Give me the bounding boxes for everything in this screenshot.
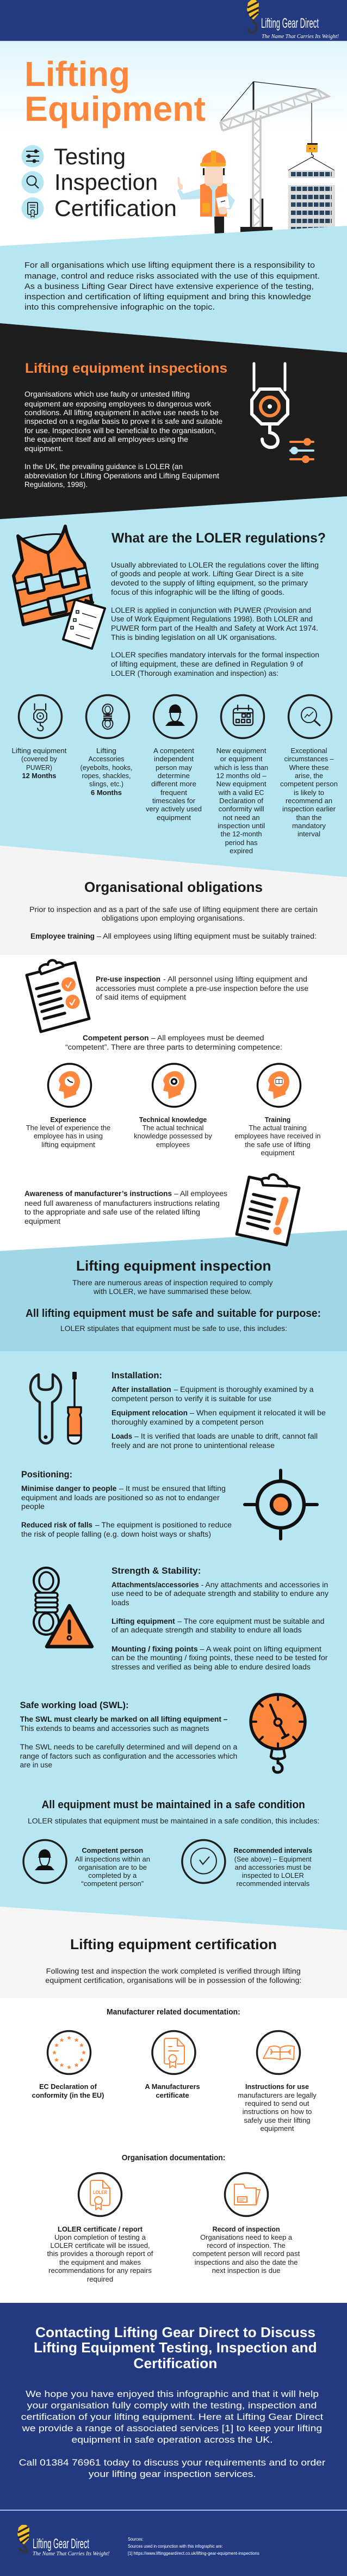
section: strength and stability — [111, 1566, 329, 1671]
footer logo: The Name That Carries Its Weight! — [33, 2551, 110, 2557]
body text: focus of this infographic will be the lifting of goods. — [111, 588, 284, 596]
section: installation: – Equipment is thoroughly examined by a — [174, 1385, 314, 1394]
header bar with logo — [0, 0, 347, 41]
caption: competent person: “competent person” — [81, 1879, 144, 1888]
caption: manufacturers certificate — [145, 2082, 200, 2099]
section: positioning: – It must be ensured that lifting — [119, 1484, 226, 1493]
caption: exceptional circumstances: competent person — [280, 780, 338, 788]
section: safe working load: Safe working load (SWL): — [20, 1700, 129, 1710]
caption: LOLER certificate: LOLER certificate / report — [58, 2225, 143, 2233]
caption: competent independent person: different more — [151, 780, 196, 788]
caption: LOLER certificate: this provides a thorough report of — [47, 2250, 153, 2258]
icon: experience head with clock — [48, 1064, 91, 1107]
panel: introduction — [0, 226, 347, 359]
text: awareness of manufacturer's instructions: equipment — [24, 1217, 60, 1225]
body text: This is binding legislation on all UK organisations. — [111, 633, 277, 642]
caption: competent person: Competent person — [82, 1846, 143, 1854]
body text: devoted to the supply of lifting equipment, so the primary — [111, 579, 308, 587]
section: strength and stability: use need to be of adequate strength and stability to endure any — [111, 1589, 329, 1598]
section: strength and stability: Mounting / fixing points — [111, 1645, 198, 1653]
caption: competent person — [75, 1846, 150, 1888]
caption: new equipment: New equipment — [216, 747, 267, 755]
sources: Sources: — [128, 2536, 144, 2542]
caption: technical knowledge — [134, 1116, 212, 1149]
caption: lifting accessories 6 months: ropes, shackles, — [82, 772, 131, 780]
caption: EC declaration: conformity (in the EU) — [32, 2091, 104, 2099]
caption: record of inspection: competent person will record past — [193, 2250, 300, 2258]
caption: LOLER certificate: the equipment and makes — [59, 2258, 141, 2266]
caption: instructions for use: safely use their lifting — [244, 2116, 310, 2124]
text: pre-use inspection — [96, 975, 308, 1001]
caption: training: employees have received in — [235, 1132, 321, 1140]
caption: competent independent person: A competent — [153, 747, 194, 755]
caption: exceptional circumstances: arise, the — [295, 772, 323, 780]
caption: LOLER certificate: required — [87, 2275, 113, 2283]
caption: technical knowledge: employees — [156, 1141, 190, 1149]
body text: of goods and people at work. Lifting Gear Direct is a site — [111, 570, 303, 578]
icon: magnifier trend in circle — [288, 695, 332, 738]
icon: calendar in circle — [221, 695, 264, 738]
icon: target — [245, 1470, 317, 1539]
text: awareness of manufacturer's instructions: – All employees — [174, 1190, 227, 1198]
caption: technical knowledge: knowledge possessed by — [134, 1132, 212, 1140]
caption: lifting equipment 12 months: 12 Months — [22, 772, 57, 780]
section: installation: competent person to verify it is suitable for use — [111, 1395, 271, 1403]
caption: lifting equipment 12 months: PUWER) — [26, 763, 52, 772]
section: safe working load: range of factors such as configuration and the accessories which — [20, 1752, 237, 1760]
subheading note: LOLER stipulates that equipment must be maintained in a safe condition, this includes: — [28, 1817, 319, 1825]
section: strength and stability: loads — [111, 1599, 129, 1607]
body text: Regulations, 1998). — [24, 480, 88, 489]
caption: experience — [26, 1116, 110, 1149]
caption: record of inspection: next inspection is due — [212, 2266, 281, 2275]
body text: equipment are exposing employees to dangerous work — [24, 400, 211, 408]
caption: new equipment: 12 months old – — [216, 772, 267, 780]
caption: recommended intervals: recommended intervals — [236, 1879, 310, 1888]
icon: hook block in circle — [18, 695, 62, 738]
icon: records folder in circle — [225, 2173, 268, 2216]
caption: new equipment: Declaration of — [219, 797, 263, 805]
caption: competent person: organisation are to be — [78, 1863, 147, 1871]
section: strength and stability: can be the mounting / fixing points, these need to be tested for — [111, 1654, 328, 1662]
text: awareness of manufacturer's instructions: need full awareness of manufacturers instructions relating — [24, 1199, 220, 1207]
caption: experience: The level of experience the — [26, 1124, 110, 1132]
section: strength and stability: - Any attachments and accessories in — [201, 1581, 328, 1589]
heading: Lifting equipment inspections — [25, 361, 227, 376]
panel: contact footer — [0, 2303, 347, 2576]
caption: exceptional circumstances: Exceptional — [290, 747, 327, 755]
section: safe working load — [20, 1700, 238, 1769]
caption: LOLER certificate: Upon completion of testing a — [54, 2233, 146, 2241]
icon: training head with book — [258, 1064, 300, 1107]
employee training line: – All employees using lifting equipment must be suitably trained: — [97, 932, 317, 940]
caption: training: The actual training — [249, 1124, 307, 1132]
caption: record of inspection: inspections and also the date the — [195, 2258, 298, 2266]
panel: what are the LOLER regulations — [12, 526, 338, 855]
section: positioning: Minimise danger to people — [21, 1484, 117, 1493]
caption: exceptional circumstances: recommend an — [286, 797, 332, 805]
intro text — [45, 1967, 301, 1985]
closing text: certification of your lifting equipment. Here at Lifting Gear Direct — [21, 2412, 324, 2422]
heading: Lifting equipment inspection — [76, 1258, 271, 1274]
intro text: Prior to inspection and as a part of the safe use of lifting equipment there are certain — [29, 905, 318, 914]
caption: lifting accessories 6 months: Lifting — [96, 747, 116, 755]
heading: Lifting equipment certification — [70, 1936, 277, 1952]
caption: competent person: All inspections within an — [75, 1855, 150, 1863]
section: positioning: Reduced risk of falls — [21, 1521, 92, 1529]
icon: worker in circle — [23, 1840, 66, 1883]
heading: maintained in safe condition: All equipment must be maintained in a safe condition — [41, 1799, 305, 1811]
caption: lifting equipment 12 months: (covered by — [21, 755, 57, 763]
text: competent person: Competent person — [83, 1034, 149, 1042]
caption: competent independent person: independent — [154, 755, 194, 763]
caption: training: equipment — [261, 1149, 295, 1157]
body text: of lifting equipment, these are defined in Regulation 9 of — [111, 660, 303, 668]
caption: exceptional circumstances: interval — [298, 830, 320, 838]
text: awareness of manufacturer's instructions — [24, 1190, 227, 1225]
caption: new equipment: expired — [230, 847, 253, 855]
subheading: organisation documentation: Organisation documentation: — [122, 2154, 225, 2162]
caption: competent independent person — [146, 747, 202, 822]
illustration: load of building floors — [288, 170, 335, 233]
caption: EC declaration: EC Declaration of — [39, 2082, 97, 2091]
sources — [128, 2536, 259, 2556]
caption: exceptional circumstances: Where these — [289, 763, 329, 772]
caption: instructions for use: instructions on how to — [243, 2107, 312, 2116]
section: installation: freely and are not prone to unintentional release — [111, 1441, 275, 1450]
illustration: tower crane — [220, 82, 334, 232]
heading: Contacting Lifting Gear Direct to Discuss — [35, 2324, 315, 2340]
caption: exceptional circumstances: inspection earlier — [282, 805, 336, 813]
intro text: with LOLER, we have summarised these below. — [93, 1287, 252, 1296]
section: positioning: – The equipment is positioned to reduce — [95, 1521, 232, 1529]
caption: new equipment: New equipment — [216, 780, 267, 788]
caption: technical knowledge: Technical knowledge — [139, 1116, 207, 1124]
caption: competent independent person: determine — [158, 772, 190, 780]
caption: lifting accessories 6 months: (eyebolts, hooks, — [80, 763, 133, 772]
section: strength and stability: stresses and verified as being able to endure desired loads — [111, 1663, 311, 1671]
caption: lifting accessories 6 months — [80, 747, 133, 797]
section: positioning: equipment and loads are positioned so as not to endanger — [21, 1494, 220, 1502]
caption: experience: lifting equipment — [41, 1141, 95, 1149]
body text: Use of Work Equipment Regulations 1998). Both LOLER and — [111, 615, 313, 623]
icon: certification document — [22, 197, 44, 220]
section: strength and stability: – The core equipment must be suitable and — [177, 1617, 324, 1625]
icon: clipboard with exclamation mark — [237, 1174, 299, 1245]
caption: recommended intervals: inspected to LOLER — [242, 1871, 304, 1879]
intro text: There are numerous areas of inspection required to comply — [72, 1279, 273, 1287]
caption: recommended intervals: Recommended intervals — [234, 1846, 312, 1854]
caption: experience: Experience — [50, 1116, 86, 1124]
text: competent person: – All employees must be deemed — [151, 1034, 264, 1042]
caption: training — [235, 1116, 321, 1157]
closing text: We hope you have enjoyed this infographic and that it will help — [26, 2389, 319, 2399]
caption: new equipment: inspection until — [218, 822, 265, 830]
section: positioning — [21, 1469, 232, 1538]
icon: hook block — [252, 363, 288, 447]
illustration: construction worker — [177, 151, 235, 241]
caption: LOLER certificate — [47, 2225, 153, 2283]
label: testing: Testing — [54, 144, 126, 169]
caption: experience: employee has in using — [34, 1132, 103, 1140]
caption: recommended intervals — [234, 1846, 312, 1888]
icon: rope with warning triangle — [34, 1568, 92, 1647]
text: pre-use inspection: Pre-use inspection — [96, 975, 160, 983]
panel: hero — [0, 41, 347, 241]
call to action: Call 01384 76961 today to discuss your requirements and to order — [19, 2457, 326, 2468]
caption: exceptional circumstances: is likely to — [294, 788, 324, 797]
caption: record of inspection: Record of inspection — [213, 2225, 280, 2233]
icon: inspection magnifier — [22, 171, 44, 194]
caption: exceptional circumstances — [280, 747, 338, 838]
icon: manufacturer certificate in circle — [152, 2031, 195, 2074]
section: installation: – It is verified that loads are unable to drift, cannot fall — [134, 1432, 318, 1440]
icon: LOLER certificate in circle — [78, 2173, 122, 2216]
section: installation: Installation: — [111, 1370, 162, 1381]
intro text — [72, 1279, 273, 1296]
heading: Organisational obligations — [84, 879, 263, 895]
section: positioning: the risk of people falling (e.g. down hoist ways or shafts) — [21, 1530, 211, 1538]
panel: organisational obligations — [0, 846, 347, 1225]
panel: lifting equipment inspections — [0, 323, 347, 519]
panel: lifting equipment inspection heading band — [0, 1174, 347, 1351]
section: strength and stability: – A weak point on lifting equipment — [200, 1645, 321, 1653]
text: pre-use inspection: of said items of equipment — [96, 993, 186, 1001]
icon: wrench and screwdriver — [30, 1372, 81, 1444]
caption: exceptional circumstances: than the — [296, 814, 322, 822]
caption: lifting accessories 6 months: 6 Months — [91, 788, 122, 797]
section: safe working load: The SWL needs to be carefully determined and will depend on a — [20, 1743, 238, 1751]
caption: competent independent person: very actively used — [146, 805, 202, 813]
caption: instructions for use: manufacturers are legally — [238, 2091, 317, 2099]
section: safe working load: are in use — [20, 1761, 52, 1769]
caption: new equipment: the 12-month — [221, 830, 262, 838]
logo tagline: The Name That Carries Its Weight! — [262, 34, 339, 40]
subheading: All lifting equipment must be safe and suitable for purpose: — [26, 1308, 321, 1320]
section: strength and stability: Attachments/accessories — [111, 1581, 199, 1589]
illustration: hi-vis vest — [14, 526, 93, 625]
heading: Lifting Equipment Testing, Inspection and — [34, 2339, 317, 2356]
icon: EU stars in circle — [48, 2031, 90, 2074]
body text: equipment. — [24, 445, 63, 453]
caption: instructions for use — [238, 2082, 317, 2133]
subheading note: LOLER stipulates that equipment must be safe to use, this includes: — [60, 1324, 287, 1333]
heading: What are the LOLER regulations? — [111, 531, 326, 546]
caption: instructions for use: Instructions for use — [245, 2082, 309, 2091]
intro text: For all organisations which use lifting equipment there is a responsibility to — [24, 261, 315, 270]
caption: LOLER certificate: recommendations for any repairs — [48, 2266, 152, 2275]
section: strength and stability: of an adequate strength and stability to endure all loads — [111, 1626, 302, 1634]
body text — [24, 390, 222, 489]
section: safe working load: This extends to beams and accessories such as magnets — [20, 1724, 209, 1733]
caption: manufacturers certificate: certificate — [156, 2091, 189, 2099]
icon: orange and blue sliders — [290, 438, 313, 463]
caption: new equipment: with a valid EC — [218, 788, 264, 797]
caption: new equipment: period has — [225, 839, 258, 847]
icon: crane hook logo — [247, 0, 259, 33]
caption: LOLER certificate: LOLER certificate will be issued, — [50, 2241, 150, 2250]
text: competent person: “competent”. There are three parts to determining competence: — [65, 1043, 282, 1051]
call to action — [19, 2457, 326, 2479]
caption: EC declaration — [32, 2082, 104, 2099]
text: competent person — [65, 1034, 282, 1051]
body text: Organisations which use faulty or untested lifting — [24, 390, 190, 398]
body text: LOLER specifies mandatory intervals for the formal inspection — [111, 651, 319, 659]
label: certification: Certification — [54, 195, 177, 221]
caption: lifting accessories 6 months: Accessories — [88, 755, 125, 763]
text: awareness of manufacturer's instructions: Awareness of manufacturer’s instructions — [24, 1190, 172, 1198]
heading: Certification — [133, 2355, 217, 2371]
body text: Usually abbreviated to LOLER the regulations cover the lifting — [111, 561, 319, 569]
body text: LOLER is applied in conjunction with PUWER (Provision and — [111, 606, 311, 614]
caption: exceptional circumstances: mandatory — [292, 822, 326, 830]
body text: conditions. All lifting equipment in active use needs to be — [24, 409, 219, 417]
intro text: inspection and certification of lifting equipment and bring this knowledge — [24, 292, 311, 301]
intro text — [24, 261, 320, 312]
title: Equipment — [24, 89, 206, 128]
body text: for use. Inspections will be beneficial to the organisation, — [24, 427, 216, 435]
icon: instruction manual in circle — [257, 2031, 300, 2074]
subheading: manufacturer documentation: Manufacturer related documentation: — [107, 2008, 240, 2017]
caption: training: the safe use of lifting — [245, 1141, 311, 1149]
panel: inspection details — [0, 1351, 347, 1930]
title: Lifting — [24, 54, 130, 94]
caption: lifting equipment 12 months — [12, 747, 67, 780]
panel: lifting equipment certification — [0, 1907, 347, 2283]
section: positioning: Positioning: — [21, 1469, 72, 1480]
icon: technical knowledge head with gear — [152, 1064, 196, 1107]
section: strength and stability: Strength & Stability: — [111, 1566, 201, 1576]
caption: record of inspection: record of inspection. The — [207, 2241, 286, 2250]
section: installation: – When equipment it relocated it will be — [190, 1409, 326, 1417]
intro text: equipment certification, organisations will be in possession of the following: — [45, 1976, 301, 1985]
caption: new equipment: not need an — [223, 814, 260, 822]
caption: recommended intervals: and accessories must be — [235, 1863, 311, 1871]
caption: record of inspection — [193, 2225, 300, 2275]
icon: LOLER certificate in circle: LOLER — [93, 2190, 107, 2195]
heading — [34, 2324, 317, 2371]
closing text: your organisation fully comply with the testing, inspection and — [27, 2400, 317, 2411]
caption: technical knowledge: The actual technical — [142, 1124, 204, 1132]
caption: recommended intervals: (See above) – Equipment — [234, 1855, 312, 1863]
intro text — [29, 905, 318, 922]
title — [24, 54, 206, 128]
icon: check in circle — [182, 1840, 225, 1883]
section: installation: After installation — [111, 1385, 171, 1394]
closing text — [21, 2389, 324, 2445]
icon: testing sliders — [22, 145, 44, 168]
body text: abbreviation for Lifting Operations and Lifting Equipment — [24, 472, 219, 480]
icon: worker in circle — [153, 695, 197, 738]
icon: crane scale gauge — [251, 1694, 305, 1772]
icon: clipboard with checks — [27, 960, 89, 1032]
text: pre-use inspection: accessories must complete a pre-use inspection before the use — [96, 984, 308, 993]
caption: manufacturers certificate: A Manufacturers — [145, 2082, 200, 2091]
section: positioning: people — [21, 1502, 45, 1511]
intro text: into this comprehensive infographic on the topic. — [24, 303, 215, 312]
caption: competent independent person: frequent — [160, 788, 187, 797]
caption: competent person: completed by a — [88, 1871, 137, 1879]
caption: new equipment: or equipment — [220, 755, 263, 763]
intro text: As a business Lifting Gear Direct have extensive experience of the testing, — [24, 282, 314, 291]
section: safe working load: The SWL must clearly be marked on all lifting equipment – — [20, 1715, 228, 1723]
closing text: we provide a range of associated services [1] to keep your lifting — [22, 2423, 322, 2433]
caption: instructions for use: equipment — [260, 2124, 294, 2133]
body text: In the UK, the prevailing guidance is LOLER (an — [24, 463, 183, 471]
caption: competent independent person: person may — [156, 763, 192, 772]
closing text: equipment in safe operation across the UK. — [72, 2435, 273, 2445]
caption: instructions for use: required to send out — [245, 2099, 309, 2107]
caption: training: Training — [265, 1116, 290, 1124]
sources: [1] https://www.liftinggeardirect.co.uk/lifting-gear-equipment-inspections — [128, 2550, 259, 2556]
footer logo: Lifting Gear Direct — [33, 2536, 89, 2552]
body text: the equipment itself and all employees using the — [24, 435, 188, 443]
body text: PUWER form part of the Health and Safety at Work Act 1974. — [111, 624, 318, 632]
caption: lifting equipment 12 months: Lifting equipment — [12, 747, 67, 755]
intro text: obligations upon employing organisations. — [102, 914, 245, 922]
footer logo — [17, 2525, 110, 2557]
icon: rope in circle — [86, 695, 129, 738]
intro text: manage, control and reduce risks associated with the use of this equipment. — [24, 272, 320, 281]
caption: exceptional circumstances: circumstances – — [284, 755, 334, 763]
caption: lifting accessories 6 months: slings, etc.) — [89, 780, 123, 788]
caption: record of inspection: Organisations need to keep a — [200, 2233, 293, 2241]
illustration: small clipboard — [63, 599, 105, 649]
body text: inspected on a regular basis to prove it is safe and suitable — [24, 417, 222, 426]
section: installation: thoroughly examined by a competent person — [111, 1418, 264, 1426]
body text — [111, 561, 319, 677]
label: inspection: Inspection — [54, 169, 158, 195]
text: pre-use inspection: - All personnel using lifting equipment and — [163, 975, 307, 983]
caption: competent independent person: equipment — [157, 814, 191, 822]
section: installation: Loads — [111, 1432, 132, 1440]
employee training line: Employee training — [30, 932, 95, 940]
intro text: Following test and inspection the work completed is verified through lifting — [46, 1967, 301, 1975]
call to action: your lifting gear inspection services. — [89, 2469, 256, 2479]
sources: Sources used in conjunction with this infographic are: — [128, 2543, 223, 2549]
section: strength and stability: Lifting equipment — [111, 1617, 175, 1625]
caption: new equipment — [214, 747, 268, 855]
caption: competent independent person: timescales for — [152, 797, 196, 805]
caption: new equipment: conformity will — [219, 805, 264, 813]
caption: new equipment: which is less than — [214, 763, 268, 772]
text: awareness of manufacturer's instructions: to the appropriate and safe use of the related lifting — [24, 1208, 200, 1216]
section: installation — [111, 1370, 326, 1450]
section: installation: Equipment relocation — [111, 1409, 188, 1417]
panel: second blue background — [0, 490, 347, 877]
body text: LOLER (Thorough examination and inspection) as: — [111, 669, 278, 677]
